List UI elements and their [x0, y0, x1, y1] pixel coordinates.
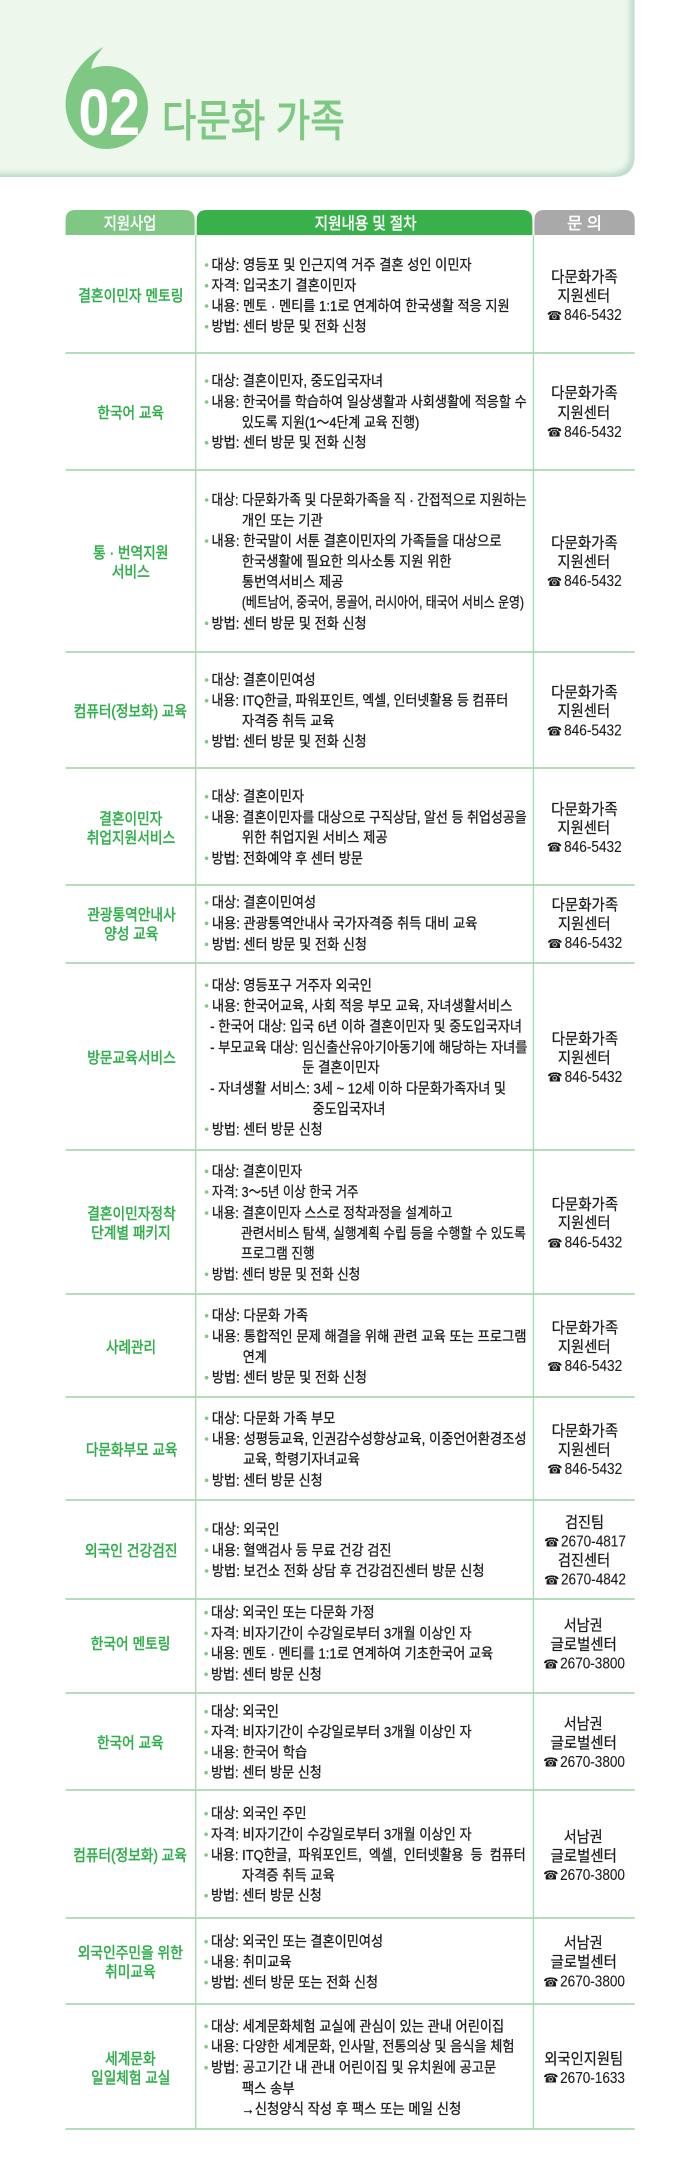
- program name: 결혼이민자: [99, 810, 162, 828]
- details: 방법: 센터 방문 및 전화 신청: [212, 1266, 360, 1283]
- table header: [66, 210, 635, 235]
- details: [205, 977, 527, 1138]
- contact: 글로벌센터: [551, 1847, 617, 1865]
- details: 통번역서비스 제공: [242, 574, 343, 591]
- row 8: [87, 1163, 622, 1283]
- details: [204, 1934, 383, 1992]
- details: 방법: 센터 방문 신청: [211, 1888, 322, 1905]
- details: 대상: 결혼이민자, 중도입국자녀: [211, 373, 383, 390]
- row 11: [85, 1513, 626, 1589]
- program name: 사례관리: [106, 1338, 156, 1357]
- program name: [87, 810, 175, 847]
- program name: [87, 1205, 176, 1242]
- contact: ☎: [547, 1235, 563, 1250]
- program name: [91, 2050, 170, 2087]
- contact: ☎: [544, 1572, 559, 1587]
- details: 내용: 한국어를 학습하여 일상생활과 사회생활에 적응할 수: [211, 394, 527, 411]
- contact: [547, 1422, 622, 1478]
- contact: ☎: [543, 1974, 559, 1989]
- contact: [547, 1030, 622, 1086]
- program name: 외국인주민을 위한: [78, 1944, 183, 1962]
- program name: 일일체험 교실: [91, 2069, 170, 2087]
- contact: [543, 1616, 625, 1673]
- program name: 통 · 번역지원: [93, 544, 168, 562]
- details: [205, 373, 527, 452]
- contact: 다문화가족: [551, 534, 618, 552]
- contact: 2670-3800: [560, 1754, 625, 1771]
- details: 대상: 결혼이민자: [211, 789, 304, 806]
- details: 한국생활에 필요한 의사소통 지원 위한: [242, 553, 451, 570]
- contact: ☎: [547, 1359, 563, 1374]
- details: 내용: 한국말이 서툰 결혼이민자의 가족들을 대상으로: [211, 533, 502, 550]
- contact: 다문화가족: [551, 384, 618, 402]
- details: - 한국어 대상: 입국 6년 이하 결혼이민자 및 중도입국자녀: [210, 1018, 522, 1035]
- details: 대상: 외국인: [212, 1522, 279, 1539]
- contact: 지원센터: [558, 915, 611, 933]
- program name: 양성 교육: [104, 925, 158, 943]
- details: - 자녀생활 서비스: 3세 ~ 12세 이하 다문화가족자녀 및: [210, 1080, 506, 1097]
- contact: 846-5432: [565, 935, 622, 952]
- details: [205, 1410, 527, 1489]
- details: 대상: 다문화 가족: [212, 1308, 308, 1325]
- contact: ☎: [547, 1462, 563, 1477]
- contact: 지원센터: [558, 1049, 611, 1067]
- contact: 다문화가족: [551, 268, 618, 286]
- details: - 부모교육 대상: 임신출산유아기아동기에 해당하는 자녀를: [210, 1039, 527, 1056]
- details: 연계: [243, 1349, 267, 1366]
- contact: 서남권: [564, 1616, 603, 1635]
- contact: 다문화가족: [551, 683, 618, 702]
- details: 자격증 취득 교육: [242, 713, 334, 730]
- header: content and procedure: [197, 210, 532, 235]
- header: support program: 지원사업: [104, 215, 156, 233]
- details: 내용: ITQ한글, 파워포인트, 엑셀, 인터넷활용 등 컴퓨터: [211, 693, 508, 710]
- program name: 단계별 패키지: [91, 1224, 171, 1242]
- program name: 외국인 건강검진: [85, 1542, 178, 1560]
- panel: title banner: [0, 0, 635, 177]
- details: 둔 결혼이민자: [302, 1060, 380, 1077]
- details: 방법: 센터 방문 및 전화 신청: [212, 1370, 367, 1387]
- contact: 지원센터: [558, 1214, 611, 1232]
- row 3: [93, 492, 622, 632]
- contact: ☎: [543, 1656, 559, 1671]
- details: 개인 또는 기관: [242, 512, 323, 529]
- contact: 다문화가족: [552, 1422, 618, 1440]
- details: 내용: 멘토 · 멘티를 1:1로 연계하여 한국생활 적응 지원: [211, 298, 510, 315]
- details: 대상: 결혼이민여성: [212, 895, 316, 912]
- row 13: [97, 1704, 625, 1782]
- row 5: [87, 789, 622, 867]
- program name: 결혼이민자 멘토링: [78, 287, 183, 305]
- details: 대상: 다문화 가족 부모: [212, 1410, 335, 1427]
- details: 대상: 외국인 주민: [211, 1806, 307, 1823]
- details: 내용: 성평등교육, 인권감수성향상교육, 이중언어환경조성: [212, 1431, 527, 1448]
- details: [205, 672, 508, 751]
- details: 방법: 센터 방문 및 전화 신청: [211, 734, 367, 751]
- contact: [547, 800, 622, 856]
- details: 있도록 지원(1～4단계 교육 진행): [242, 414, 419, 431]
- row 9: [106, 1308, 622, 1387]
- program name: 세계문화: [105, 2050, 156, 2068]
- contact: [543, 1934, 625, 1991]
- program name: 컴퓨터(정보화) 교육: [73, 1846, 187, 1865]
- contact: 2670-3800: [560, 1655, 625, 1673]
- details: 자격: 비자기간이 수강일로부터 3개월 이상인 자: [211, 1625, 472, 1642]
- details: [205, 1522, 485, 1580]
- contact: [547, 1319, 622, 1375]
- contact: 지원센터: [557, 287, 610, 305]
- contact: [543, 1715, 625, 1771]
- program name: 취업지원서비스: [87, 829, 175, 847]
- contact: 다문화가족: [552, 1319, 618, 1337]
- contact: [543, 1828, 625, 1884]
- contact: ☎: [543, 1868, 559, 1883]
- details: 대상: 외국인: [211, 1704, 279, 1721]
- contact: 검진센터: [558, 1551, 610, 1570]
- contact: ☎: [547, 1070, 563, 1085]
- contact: ☎: [547, 308, 562, 323]
- contact: [544, 1513, 626, 1589]
- details: [205, 257, 510, 336]
- row 6: [87, 895, 622, 953]
- details: [204, 1704, 472, 1782]
- header: content and procedure: 지원내용 및 절차: [315, 215, 417, 233]
- details: 내용: 취미교육: [211, 1954, 291, 1971]
- contact: 서남권: [564, 1828, 603, 1846]
- details: 방법: 전화예약 후 센터 방문: [211, 850, 363, 867]
- details: 내용: 통합적인 문제 해결을 위해 관련 교육 또는 프로그램: [212, 1328, 527, 1345]
- contact: 다문화가족: [552, 1030, 618, 1048]
- details: →신청양식 작성 후 팩스 또는 메일 신청: [241, 2101, 461, 2118]
- contact: 2670-3800: [560, 1973, 625, 1991]
- program name: [87, 906, 176, 943]
- details: 내용: 한국어 학습: [211, 1745, 307, 1762]
- details: 내용: 관광통역안내사 국가자격증 취득 대비 교육: [212, 915, 477, 932]
- details: 대상: 외국인 또는 다문화 가정: [211, 1605, 375, 1622]
- contact: 지원센터: [558, 1338, 611, 1356]
- details: 관련서비스 탐색, 실행계획 수립 등을 수행할 수 있도록: [241, 1225, 526, 1242]
- contact: 지원센터: [558, 1441, 611, 1459]
- row 7: [87, 977, 622, 1138]
- row 4: [74, 672, 622, 751]
- details: 내용: 멘토 · 멘티를 1:1로 연계하여 기초한국어 교육: [211, 1646, 493, 1663]
- contact: 846-5432: [564, 839, 622, 856]
- contact: 846-5432: [565, 1234, 622, 1252]
- contact: 846-5432: [565, 1069, 622, 1086]
- icon: number bubble: [66, 47, 148, 149]
- contact: 외국인지원팀: [544, 2050, 623, 2068]
- details: [205, 492, 527, 632]
- row 2: [97, 373, 622, 452]
- contact: 2670-1633: [560, 2070, 625, 2087]
- details: 방법: 센터 방문 및 전화 신청: [211, 615, 367, 632]
- details: 대상: 영등포 및 인근지역 거주 결혼 성인 이민자: [211, 257, 472, 274]
- details: 위한 취업지원 서비스 제공: [242, 830, 388, 847]
- contact: 지원센터: [557, 819, 610, 837]
- details: 내용: 혈액검사 등 무료 건강 검진: [212, 1542, 392, 1559]
- contact: [547, 268, 622, 324]
- contact: 검진팀: [565, 1513, 604, 1532]
- details: [205, 789, 527, 867]
- details: 자격: 비자기간이 수강일로부터 3개월 이상인 자: [211, 1826, 472, 1843]
- details: 방법: 공고기간 내 관내 어린이집 및 유치원에 공고문: [211, 2060, 496, 2077]
- details: 대상: 외국인 또는 결혼이민여성: [211, 1934, 383, 1951]
- details: 방법: 센터 방문 및 전화 신청: [211, 435, 367, 452]
- details: [204, 1605, 493, 1683]
- program name: 관광통역안내사: [87, 906, 176, 924]
- details: 자격: 비자기간이 수강일로부터 3개월 이상인 자: [211, 1724, 472, 1741]
- details: [205, 1163, 526, 1283]
- contact: 2670-3800: [560, 1867, 625, 1884]
- contact: [547, 683, 622, 740]
- contact: 서남권: [564, 1934, 603, 1952]
- contact: 지원센터: [557, 702, 610, 720]
- program name: 서비스: [112, 563, 150, 581]
- contact: ☎: [547, 840, 562, 855]
- contact: 다문화가족: [551, 800, 618, 819]
- details: 대상: 다문화가족 및 다문화가족을 직 · 간접적으로 지원하는: [211, 492, 527, 509]
- row 14: [73, 1806, 625, 1905]
- details: 방법: 센터 방문 신청: [212, 1472, 323, 1489]
- program name: [93, 544, 168, 581]
- details: 방법: 보건소 전화 상담 후 건강검진센터 방문 신청: [212, 1563, 485, 1580]
- contact: [547, 384, 622, 441]
- contact: [543, 2050, 625, 2087]
- details: 자격: 입국초기 결혼이민자: [211, 278, 356, 295]
- program name: 컴퓨터(정보화) 교육: [74, 702, 187, 721]
- contact: [547, 534, 622, 590]
- contact: 서남권: [564, 1715, 603, 1733]
- contact: 다문화가족: [552, 896, 618, 914]
- contact: ☎: [547, 723, 562, 738]
- header: inquiry: 문 의: [567, 215, 602, 233]
- contact: 846-5432: [564, 573, 622, 590]
- contact: 글로벌센터: [551, 1953, 617, 1971]
- contact: 846-5432: [564, 424, 622, 441]
- contact: 다문화가족: [552, 1195, 618, 1214]
- section number: 02: [78, 75, 140, 149]
- row 12: [91, 1605, 625, 1683]
- details: 자격증 취득 교육: [242, 1867, 335, 1884]
- contact: [547, 896, 622, 952]
- program name: 방문교육서비스: [87, 1049, 176, 1067]
- program name: 다문화부모 교육: [86, 1441, 178, 1459]
- header: inquiry: [534, 210, 635, 235]
- contact: ☎: [547, 936, 563, 951]
- contact: ☎: [543, 2071, 559, 2086]
- details: 팩스 송부: [242, 2080, 295, 2097]
- contact: 지원센터: [557, 553, 610, 571]
- details: 방법: 센터 방문 신청: [211, 1765, 322, 1782]
- details: 방법: 센터 방문 신청: [212, 1121, 323, 1138]
- contact: 2670-4817: [561, 1533, 626, 1551]
- details: 내용: 한국어교육, 사회 적응 부모 교육, 자녀생활서비스: [212, 998, 512, 1015]
- program name: 취미교육: [105, 1963, 156, 1981]
- details: 방법: 센터 방문 및 전화 신청: [212, 936, 367, 953]
- program name: 한국어 교육: [97, 1734, 164, 1752]
- contact: 2670-4842: [561, 1571, 626, 1589]
- details: 방법: 센터 방문 또는 전화 신청: [211, 1975, 378, 1992]
- details: 교육, 학령기자녀교육: [243, 1452, 360, 1469]
- details: 대상: 세계문화체험 교실에 관심이 있는 관내 어린이집: [211, 2018, 504, 2035]
- contact: ☎: [543, 1755, 559, 1770]
- contact: 글로벌센터: [551, 1635, 617, 1654]
- details: 내용: 결혼이민자를 대상으로 구직상담, 알선 등 취업성공을: [211, 809, 527, 826]
- contact: 846-5432: [565, 1461, 622, 1478]
- details: 방법: 센터 방문 및 전화 신청: [211, 319, 367, 336]
- row 10: [86, 1410, 622, 1489]
- program name: 결혼이민자정착: [87, 1205, 176, 1223]
- details: 자격: 3～5년 이상 한국 거주: [212, 1184, 358, 1201]
- contact: ☎: [544, 1534, 559, 1549]
- contact: 846-5432: [564, 307, 622, 324]
- details: 내용: ITQ한글, 파워포인트, 엑셀, 인터넷활용 등 컴퓨터: [211, 1847, 526, 1864]
- details: 프로그램 진행: [241, 1246, 315, 1263]
- row 15: [78, 1934, 625, 1992]
- details: [205, 1308, 527, 1387]
- details: 대상: 결혼이민자: [212, 1163, 302, 1180]
- contact: [547, 1195, 622, 1252]
- contact: 846-5432: [564, 722, 622, 740]
- details: (베트남어, 중국어, 몽골어, 러시아어, 태국어 서비스 운영): [242, 595, 524, 612]
- details: [204, 1806, 526, 1905]
- contact: ☎: [547, 574, 562, 589]
- row 16: [91, 2018, 625, 2118]
- contact: ☎: [547, 425, 562, 440]
- program name: 한국어 교육: [97, 404, 164, 422]
- contact: 846-5432: [565, 1358, 622, 1375]
- contact: 지원센터: [557, 404, 610, 422]
- details: [204, 2018, 515, 2118]
- program name: [78, 1944, 183, 1981]
- title: 다문화 가족: [162, 97, 345, 146]
- details: 내용: 다양한 세계문화, 인사말, 전통의상 및 음식을 체험: [211, 2039, 515, 2056]
- details: 중도입국자녀: [312, 1101, 385, 1118]
- details: 내용: 결혼이민자 스스로 정착과정을 설계하고: [212, 1205, 452, 1222]
- program name: 한국어 멘토링: [91, 1635, 170, 1653]
- details: 대상: 결혼이민여성: [211, 672, 316, 689]
- header: support program: [66, 210, 195, 235]
- details: 대상: 영등포구 거주자 외국인: [212, 977, 372, 994]
- details: 방법: 센터 방문 신청: [211, 1666, 322, 1683]
- details: [205, 895, 477, 953]
- row 1: [78, 257, 622, 336]
- contact: 글로벌센터: [551, 1734, 617, 1752]
